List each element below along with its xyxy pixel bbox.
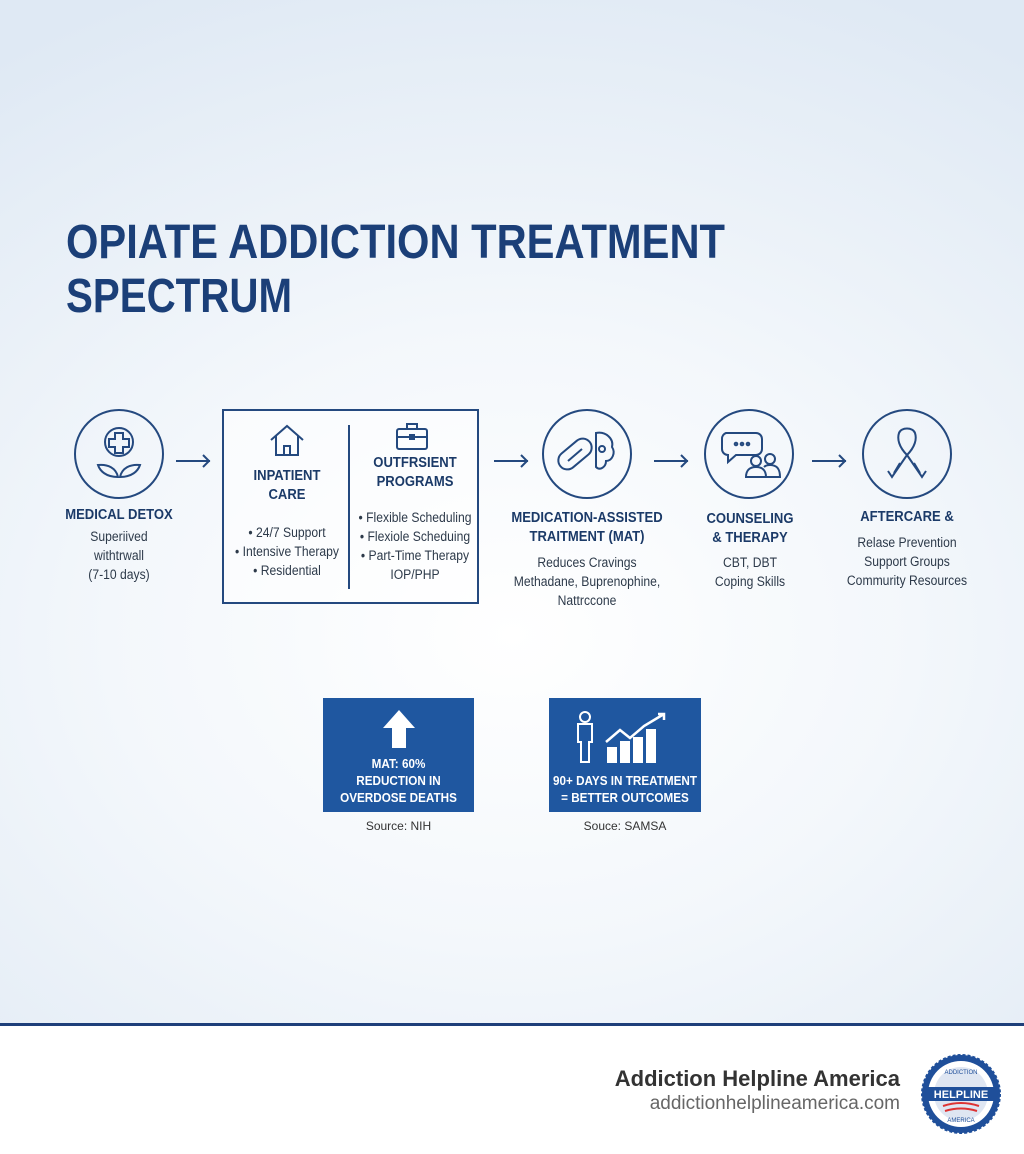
text: MAT: TRAITMENT (MAT) <box>529 529 645 545</box>
text: medical detox: withtrwall <box>94 548 144 563</box>
title: SPECTRUM <box>66 270 292 323</box>
icon: house <box>270 424 304 456</box>
text: medical detox: Superiived <box>90 529 148 544</box>
footer brand text: addictionhelplineamerica.com <box>650 1093 900 1114</box>
text: MAT: MEDICATION-ASSISTED <box>511 510 663 526</box>
text: aftercare: AFTERCARE & <box>860 509 954 525</box>
footer brand text <box>615 1066 900 1114</box>
outpatient bullets: IOP/PHP <box>390 567 440 582</box>
text: counseling: Coping Skills <box>715 574 785 589</box>
icon: briefcase <box>396 423 428 450</box>
text: aftercare: Relase Prevention <box>857 535 957 550</box>
inpatient heading <box>254 468 320 503</box>
text: counseling: COUNSELING <box>706 511 793 527</box>
text: counseling <box>706 511 793 589</box>
icon: ribbon <box>862 409 952 499</box>
title <box>66 216 725 323</box>
arrow <box>176 454 210 468</box>
text: aftercare <box>847 509 967 588</box>
text: medical detox: MEDICAL DETOX <box>65 507 173 523</box>
logo: AMERICA <box>947 1118 975 1124</box>
inpatient bullets: • 24/7 Support <box>248 525 326 540</box>
text: counseling: & THERAPY <box>712 530 788 546</box>
outpatient heading <box>373 455 457 490</box>
stat: 90 days: 90+ DAYS IN TREATMENT <box>553 773 697 788</box>
outpatient heading: OUTFRSIENT <box>373 455 457 471</box>
stat: MAT: Source: NIH <box>366 819 431 833</box>
icon: person with chart <box>577 711 666 763</box>
stat: MAT: OVERDOSE DEATHS <box>340 790 457 805</box>
inpatient bullets: • Intensive Therapy <box>235 544 339 559</box>
text: MAT: Reduces Cravings <box>537 555 637 570</box>
icon: up arrow <box>383 710 415 748</box>
arrow <box>494 454 528 468</box>
icon: MAT <box>542 409 632 499</box>
logo: HELPLINE <box>934 1089 988 1101</box>
inpatient bullets <box>235 525 339 578</box>
outpatient bullets <box>358 510 472 582</box>
footer brand text: Addiction Helpline America <box>615 1066 900 1091</box>
outpatient bullets: • Flexible Scheduling <box>358 510 472 525</box>
inpatient heading: INPATIENT <box>254 468 320 484</box>
logo: ADDICTION <box>944 1070 978 1076</box>
text: MAT: Methadane, Buprenophine, <box>514 574 660 589</box>
stat: MAT: REDUCTION IN <box>356 773 441 788</box>
arrow <box>654 454 688 468</box>
inpatient heading: CARE <box>269 487 305 503</box>
stat: 90 days <box>549 698 701 833</box>
stat: MAT <box>323 698 474 833</box>
icon: medical detox <box>74 409 164 499</box>
text: medical detox: (7-10 days) <box>88 567 150 582</box>
outpatient bullets: • Flexiole Scheduing <box>360 529 470 544</box>
outpatient heading: PROGRAMS <box>377 474 453 490</box>
outpatient bullets: • Part-Time Therapy <box>361 548 469 563</box>
stat: MAT: MAT: 60% <box>372 756 425 771</box>
panel: inpatient/outpatient <box>222 409 479 604</box>
stat: 90 days: = BETTER OUTCOMES <box>561 790 689 805</box>
text: aftercare: Commurity Resources <box>847 573 967 588</box>
text: MAT: Nattrccone <box>558 593 616 608</box>
logo <box>921 1054 1001 1134</box>
arrow <box>812 454 846 468</box>
icon: counseling <box>704 409 794 499</box>
footer <box>0 1023 1024 1154</box>
text: medical detox <box>65 507 173 582</box>
text: counseling: CBT, DBT <box>723 555 777 570</box>
inpatient bullets: • Residential <box>253 563 321 578</box>
stat: 90 days: Souce: SAMSA <box>584 819 666 833</box>
text: aftercare: Support Groups <box>864 554 950 569</box>
text: MAT <box>511 510 663 608</box>
